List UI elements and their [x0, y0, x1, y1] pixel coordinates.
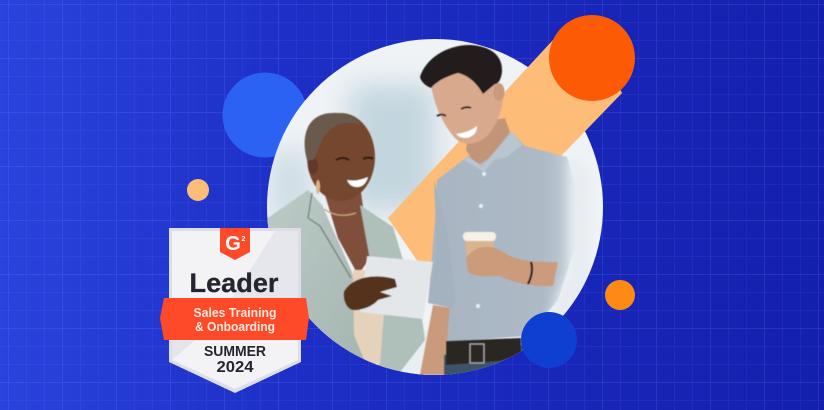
- man: shirt buttons: [476, 172, 486, 308]
- badge: category text: Sales Training: [194, 306, 276, 320]
- woman: necklace: [324, 209, 356, 215]
- man: collar: [464, 132, 522, 172]
- woman: earring: [316, 180, 320, 194]
- peach diagonal stripe: [388, 40, 622, 284]
- woman: beige top: [353, 270, 385, 364]
- woman: eyes: [336, 158, 373, 160]
- tablet: [360, 256, 433, 319]
- man: left forearm: [420, 305, 452, 375]
- badge: G2 logo: G: [225, 233, 241, 255]
- woman: cropped hair: [305, 113, 361, 160]
- badge: G2 logo: 2: [242, 236, 246, 243]
- man: sleeve: [429, 180, 451, 308]
- decorative circle: royal blue: [521, 312, 577, 368]
- man: smile: [456, 126, 477, 138]
- man: neck: [466, 118, 510, 166]
- badge: red ribbon: [160, 298, 309, 340]
- woman: tablet and hand: [344, 256, 433, 319]
- decorative circle: bright blue: [222, 72, 308, 158]
- woman: hand holding tablet: [344, 276, 397, 310]
- photo: two smiling colleagues in a circle: [260, 30, 622, 380]
- woman: smile: [347, 177, 368, 187]
- man: shirt fade on right: [548, 155, 590, 320]
- man: belt: [446, 338, 521, 365]
- G2 Leader badge: [160, 228, 309, 393]
- man: eyes: [437, 107, 471, 116]
- woman: ear: [308, 158, 318, 174]
- badge: season text: SUMMER: [204, 344, 266, 360]
- badge: season text: 2024: [216, 359, 254, 376]
- woman: blazer left side: [268, 190, 376, 364]
- man: ear: [494, 83, 504, 101]
- man: hair: [420, 45, 502, 94]
- woman: neck and chest: [324, 192, 370, 271]
- woman: lapel shadow: [308, 193, 351, 278]
- man: hand and right forearm: [466, 247, 558, 286]
- man: belt buckle: [470, 344, 484, 363]
- man: jeans: [443, 344, 523, 375]
- badge: light grey diagonal facets: [232, 231, 298, 298]
- man: watch band: [528, 262, 532, 284]
- decorative circle: large orange: [549, 15, 635, 101]
- badge: category text: [194, 306, 276, 334]
- badge: category text: & Onboarding: [195, 320, 275, 334]
- man: coffee cup: [462, 232, 496, 257]
- photo backdrop: [260, 30, 610, 380]
- decorative circle: small peach: [187, 179, 209, 201]
- man: [420, 45, 590, 380]
- man: face: [431, 68, 503, 144]
- badge: Leader heading: Leader: [190, 268, 279, 298]
- woman: blazer right side: [360, 205, 425, 372]
- badge: G2 red tab: [220, 228, 250, 260]
- woman: head: [307, 113, 375, 201]
- badge shield: [169, 228, 301, 393]
- badge: season text: [204, 344, 266, 376]
- woman: [262, 113, 425, 375]
- man: shirt body: [428, 132, 580, 342]
- decorative circle: small orange: [605, 280, 635, 310]
